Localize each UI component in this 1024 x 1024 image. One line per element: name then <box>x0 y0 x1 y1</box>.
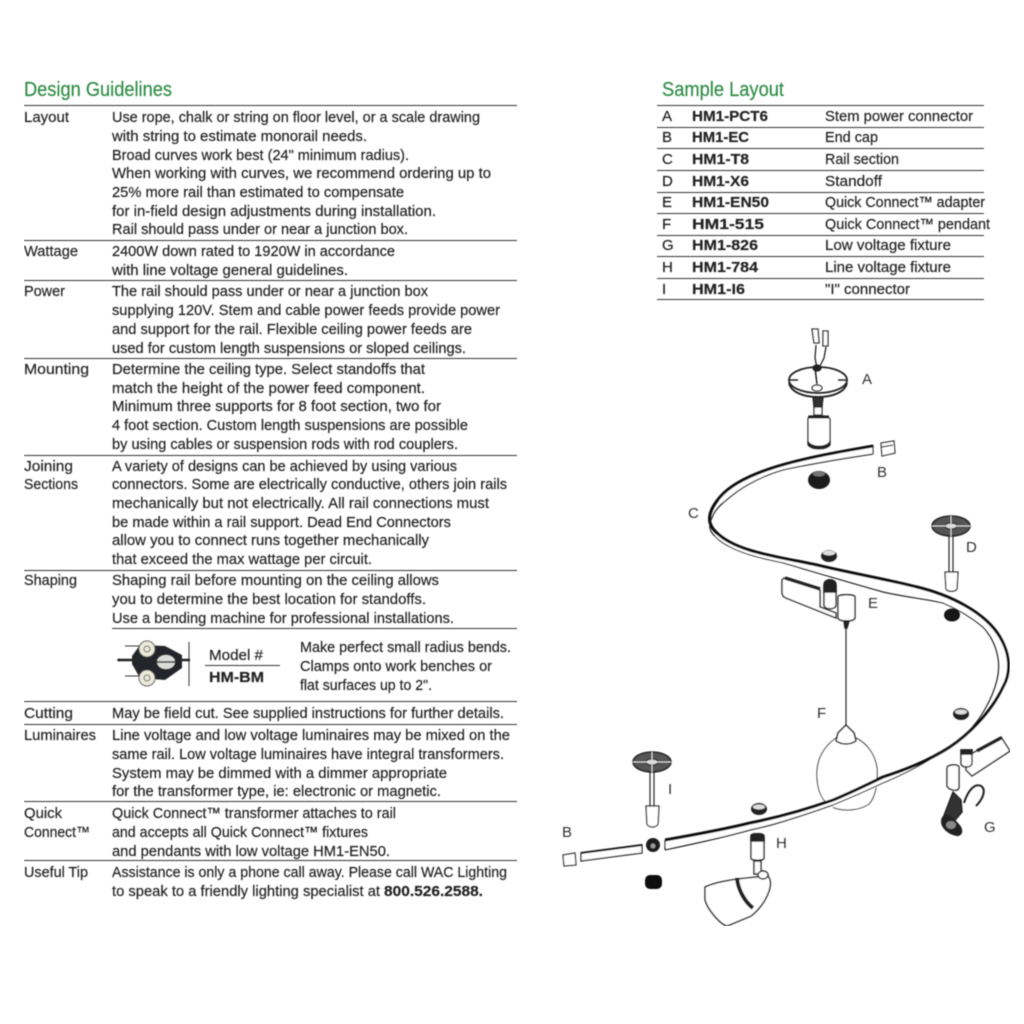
row: useful tip <box>24 864 507 900</box>
row: luminaires: Luminaires <box>24 727 96 744</box>
stem power connector A <box>789 329 847 449</box>
part row I: "I" connector <box>825 281 910 298</box>
row: quick connect: Connect™ <box>24 824 90 841</box>
row: joining sections <box>24 458 507 568</box>
row: mounting <box>24 361 468 453</box>
row: joining sections: A variety of designs can be achieved by using various <box>112 458 457 475</box>
row: quick connect <box>24 805 396 860</box>
row: joining sections: be made within a rail support. Dead End Connectors <box>112 514 451 531</box>
row: useful tip: Assistance is only a phone call away. Please call WAC Lighting <box>112 864 507 881</box>
text: bending machine description: flat surfaces up to 2". <box>300 677 432 694</box>
end cap B top <box>881 441 895 456</box>
row: useful tip: 800.526.2588. <box>384 883 483 900</box>
quick connect adapter E <box>782 578 855 628</box>
panel: sample layout parts table <box>657 79 991 300</box>
label G: G <box>984 819 996 836</box>
row: layout: Rail should pass under or near a junction box. <box>112 221 408 238</box>
row: wattage: 2400W down rated to 1920W in accordance <box>112 243 395 260</box>
label C: C <box>688 505 699 522</box>
part row B: HM1-EC <box>692 129 749 146</box>
part row E: HM1-EN50 <box>692 194 769 211</box>
row: shaping: Shaping <box>24 572 77 589</box>
part row D: D <box>662 173 673 190</box>
part row F <box>662 216 991 233</box>
row: joining sections: mechanically but not electrically. All rail connections must <box>112 495 490 512</box>
pendant F: F <box>817 705 826 722</box>
part row C <box>662 151 899 168</box>
panel: design guidelines <box>24 79 517 900</box>
row: quick connect: Quick Connect™ transformer attaches to rail <box>112 805 396 822</box>
row: layout: with string to estimate monorail needs. <box>111 128 367 145</box>
standoff D <box>932 516 970 591</box>
row: quick connect: and accepts all Quick Connect™ fixtures <box>112 824 368 841</box>
pendant F <box>817 628 877 810</box>
part row F: Quick Connect™ pendant <box>825 216 991 233</box>
row: layout: 25% more rail than estimated to compensate <box>112 184 404 201</box>
part row G: Low voltage fixture <box>825 237 951 254</box>
part row C: Rail section <box>825 151 899 168</box>
label H: H <box>776 835 787 852</box>
part row D: HM1-X6 <box>692 173 749 190</box>
label: model number: HM-BM <box>209 669 264 686</box>
part row H <box>662 259 951 276</box>
row: luminaires: same rail. Low voltage luminaires have integral transformers. <box>112 746 504 763</box>
row: layout <box>24 109 491 238</box>
row: luminaires: System may be dimmed with a dimmer appropriate <box>112 765 447 782</box>
row: shaping <box>24 572 454 627</box>
part row G: HM1-826 <box>692 237 758 254</box>
row: cutting: Cutting <box>24 705 73 722</box>
standoff puck upper <box>821 550 837 562</box>
row: shaping: Shaping rail before mounting on the ceiling allows <box>112 572 439 589</box>
part row E: E <box>662 194 672 211</box>
row: joining sections: connectors. Some are electrically conductive, others join rails <box>112 476 507 493</box>
row: luminaires: Line voltage and low voltage luminaires may be mixed on the <box>112 727 510 744</box>
row: shaping: Use a bending machine for professional installations. <box>112 610 454 627</box>
standoff base lower <box>645 875 662 889</box>
part row C: C <box>662 151 673 168</box>
label: model number <box>205 647 280 686</box>
label E: E <box>868 595 878 612</box>
part row G: G <box>662 237 674 254</box>
label: model number: Model # <box>209 647 264 664</box>
row: wattage: Wattage <box>24 243 78 260</box>
text: bending machine description: Clamps onto work benches or <box>300 658 492 675</box>
part row H: H <box>662 259 673 276</box>
diagram: monorail sample layout <box>562 329 1010 926</box>
row: layout: Broad curves work best (24" minimum radius). <box>112 147 409 164</box>
row: wattage <box>24 243 395 279</box>
part row I: HM1-I6 <box>692 281 745 298</box>
row: wattage: with line voltage general guidelines. <box>111 262 348 279</box>
label D: D <box>966 539 977 556</box>
part row D <box>662 173 883 190</box>
row: mounting: 4 foot section. Custom length suspensions are possible <box>112 417 468 434</box>
part row I <box>662 281 910 298</box>
row: quick connect: Quick <box>24 805 62 822</box>
rail section C <box>581 445 1009 861</box>
standoff I <box>633 752 671 827</box>
label A: A <box>862 371 872 388</box>
text: bending machine description: Make perfect small radius bends. <box>300 639 511 656</box>
standoff puck lower left <box>751 803 767 815</box>
row: shaping: you to determine the best location for standoffs. <box>112 591 426 608</box>
row: joining sections: allow you to connect runs together mechanically <box>112 532 429 549</box>
row: mounting: by using cables or suspension rods with rod couplers. <box>112 436 458 453</box>
label B top: B <box>877 464 887 481</box>
icon: bending machine <box>117 641 190 686</box>
standoff puck dark <box>944 608 960 622</box>
heading: design guidelines: Design Guidelines <box>24 79 172 101</box>
part row C: HM1-T8 <box>692 151 749 168</box>
row: power: Power <box>24 283 65 300</box>
label B bottom: B <box>562 824 572 841</box>
row: power: The rail should pass under or near a junction box <box>112 283 428 300</box>
row: layout: Use rope, chalk or string on floor level, or a scale drawing <box>112 109 480 126</box>
row: joining sections: Sections <box>24 476 78 493</box>
part row A <box>662 108 973 125</box>
row: layout: When working with curves, we recommend ordering up to <box>112 165 491 182</box>
part row H: Line voltage fixture <box>825 259 951 276</box>
row: cutting: May be field cut. See supplied instructions for further details. <box>112 705 504 722</box>
low voltage fixture G <box>942 737 1010 835</box>
part row B: End cap <box>825 129 878 146</box>
row: layout: Layout <box>24 109 70 126</box>
part row A: A <box>662 108 672 125</box>
label I: I <box>668 781 672 798</box>
row: useful tip: Useful Tip <box>24 864 88 881</box>
part row D: Standoff <box>825 173 883 190</box>
part row I: I <box>662 281 666 298</box>
part row A: Stem power connector <box>825 108 973 125</box>
row: useful tip: to speak to a friendly lighting specialist at <box>112 883 381 900</box>
part row F: HM1-515 <box>692 216 764 233</box>
part row A: HM1-PCT6 <box>692 108 768 125</box>
row: power: and support for the rail. Flexible ceiling power feeds are <box>112 321 472 338</box>
row: mounting: Minimum three supports for 8 foot section, two for <box>112 398 441 415</box>
row: power <box>24 283 500 357</box>
I connector <box>646 838 660 852</box>
row: luminaires <box>24 727 510 800</box>
row: power: used for custom length suspensions or sloped ceilings. <box>112 340 466 357</box>
line voltage fixture H <box>705 834 770 926</box>
end cap B bottom <box>563 853 576 866</box>
row: joining sections: that exceed the max wattage per circuit. <box>112 551 372 568</box>
standoff base top <box>808 471 830 489</box>
row: mounting: Mounting <box>24 361 89 378</box>
heading: sample layout: Sample Layout <box>662 79 784 101</box>
part row E <box>662 194 985 211</box>
row: quick connect: and pendants with low voltage HM1-EN50. <box>112 843 390 860</box>
part row G <box>662 237 951 254</box>
standoff puck lower right <box>953 708 969 720</box>
text: bending machine description <box>300 639 511 694</box>
row: mounting: Determine the ceiling type. Select standoffs that <box>112 361 426 378</box>
row: layout: for in-field design adjustments during installation. <box>112 203 436 220</box>
part row B <box>662 129 878 146</box>
part row H: HM1-784 <box>692 259 759 276</box>
part row E: Quick Connect™ adapter <box>825 194 985 211</box>
row: luminaires: for the transformer type, ie: electronic or magnetic. <box>112 783 441 800</box>
part row B: B <box>662 129 672 146</box>
row: joining sections: Joining <box>24 458 73 475</box>
row: mounting: match the height of the power feed component. <box>112 380 425 397</box>
part row F: F <box>662 216 671 233</box>
row: power: supplying 120V. Stem and cable power feeds provide power <box>112 302 500 319</box>
